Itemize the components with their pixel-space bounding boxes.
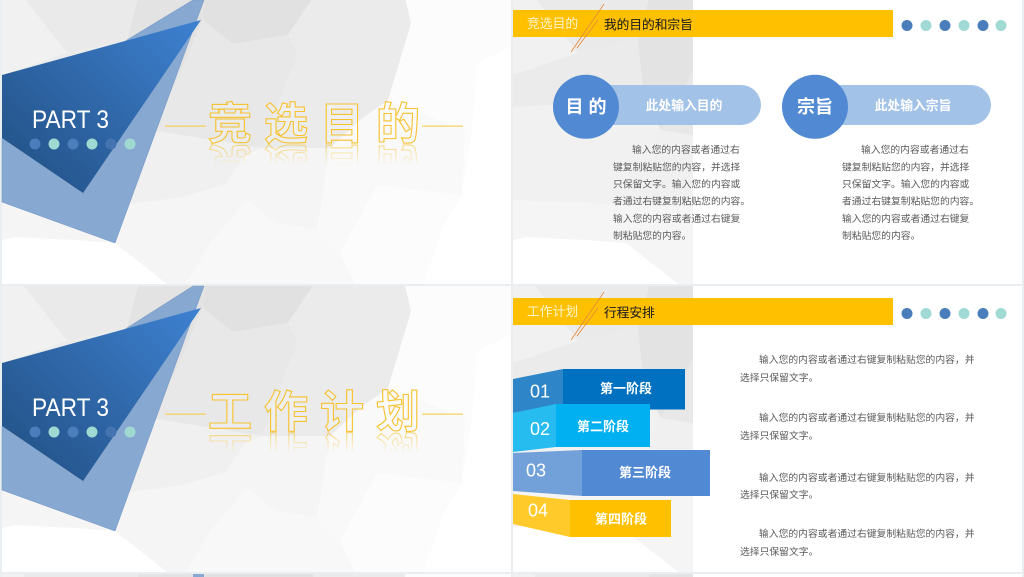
- stage 02: 02: [530, 419, 550, 439]
- text blocks: 输入您的内容或者通过右键复制粘贴您的内容，并: [759, 527, 975, 540]
- text block left: [613, 143, 750, 242]
- title with reflection: [165, 389, 463, 452]
- header bar: [513, 4, 893, 52]
- text block left: 输入您的内容或者通过右: [632, 143, 740, 156]
- dots row: [30, 426, 136, 438]
- stage 02: [513, 404, 650, 452]
- header bar: 竞选目的: [527, 16, 578, 31]
- text blocks: 输入您的内容或者通过右键复制粘贴您的内容，并: [759, 471, 975, 484]
- header bar: 我的目的和宗旨: [604, 17, 693, 32]
- text block right: 者通过右键复制粘贴您的内容。: [842, 194, 979, 208]
- text block right: 制粘贴您的内容。: [842, 229, 920, 242]
- text block right: 输入您的内容或者通过右键复: [842, 212, 970, 225]
- stage 03: 第三阶段: [619, 465, 671, 480]
- text blocks: 输入您的内容或者通过右键复制粘贴您的内容，并: [759, 353, 975, 366]
- text block right: 只保留文字。输入您的内容或: [842, 178, 970, 190]
- text blocks: 输入您的内容或者通过右键复制粘贴您的内容，并: [759, 411, 975, 424]
- title with reflection: 竞选目的: [208, 139, 432, 188]
- light blue back shape: [2, 286, 204, 531]
- text block right: 键复制粘贴您的内容，并选择: [842, 160, 970, 174]
- stage 01: 01: [530, 382, 550, 402]
- title with reflection: [165, 100, 463, 164]
- text block right: [842, 143, 979, 242]
- badge: 宗旨: [782, 75, 991, 139]
- badge: 目的: 此处输入目的: [646, 98, 723, 113]
- header dots: [902, 308, 1006, 319]
- stage 04: 04: [528, 500, 548, 520]
- stage 02: 第二阶段: [577, 419, 629, 434]
- text blocks: 选择只保留文字。: [740, 371, 818, 384]
- text block left: 只保留文字。输入您的内容或: [613, 178, 741, 190]
- light blue back shape: [2, 0, 204, 243]
- dots row: [30, 138, 136, 150]
- text blocks: 选择只保留文字。: [740, 545, 818, 558]
- text blocks: [740, 353, 975, 558]
- stage 04: [513, 494, 671, 537]
- dark blue triangle: [2, 20, 201, 193]
- title with reflection: 工作计划: [208, 427, 432, 476]
- badge: 宗旨: 宗旨: [797, 96, 833, 117]
- header dots: [902, 20, 1006, 31]
- stage 01: [513, 369, 685, 413]
- header bar: 行程安排: [604, 306, 655, 320]
- title with reflection: 工作计划: [208, 388, 432, 437]
- badge: 目的: [553, 75, 761, 139]
- next slides peeking at bottom: [2, 574, 1022, 577]
- stage 01: 第一阶段: [600, 381, 652, 396]
- text blocks: 选择只保留文字。: [740, 429, 818, 442]
- header bar: 工作计划: [527, 304, 578, 319]
- text block left: 输入您的内容或者通过右键复: [613, 212, 741, 225]
- badge: 宗旨: 此处输入宗旨: [875, 98, 951, 113]
- header bar: [513, 292, 893, 340]
- badge: 目的: 目 的: [565, 97, 607, 117]
- stage 03: 03: [526, 460, 546, 480]
- text block left: 制粘贴您的内容。: [613, 229, 691, 242]
- text block left: 键复制粘贴您的内容，并选择: [613, 160, 741, 174]
- part label: PART 3: [32, 106, 109, 134]
- title with reflection: 竞选目的: [208, 100, 432, 149]
- stage 03: [513, 450, 710, 496]
- stage 04: 第四阶段: [595, 512, 647, 526]
- slide 4: schedule: [513, 286, 1022, 572]
- slide 3: section title 工作计划: [2, 286, 511, 572]
- text block right: 输入您的内容或者通过右: [861, 143, 969, 156]
- part label: PART 3: [32, 394, 109, 422]
- slide 2: goals and purpose: [513, 0, 1022, 284]
- dark blue triangle: [2, 308, 201, 481]
- text blocks: 选择只保留文字。: [740, 488, 818, 501]
- slide 1: section title 竞选目的: [2, 0, 511, 284]
- text block left: 者通过右键复制粘贴您的内容。: [613, 194, 750, 208]
